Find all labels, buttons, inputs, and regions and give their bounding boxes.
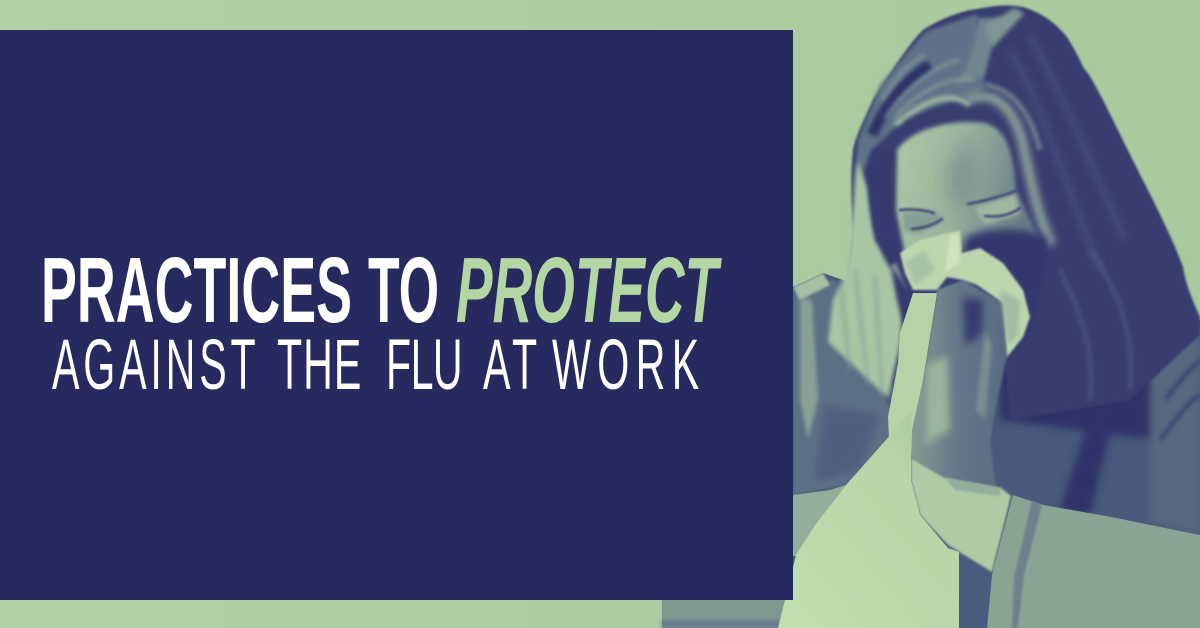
heading line 2: [52, 325, 706, 405]
photo: cloth held below hands: [778, 411, 959, 628]
panel: navy title block: [0, 30, 793, 600]
photo: woman blowing nose into tissue: [662, 5, 1200, 628]
heading line 2: THE: [277, 325, 362, 405]
photo: sweater and torso: [662, 273, 1200, 628]
heading line 2: FLU: [386, 325, 462, 405]
photo: hair: [828, 5, 1200, 420]
photo: face: [896, 122, 1048, 350]
photo: closed eyes: [900, 191, 1020, 229]
heading line 1: PROTECT: [456, 238, 722, 342]
photo: pale hair strands on left: [828, 160, 905, 398]
heading line 2: AT: [483, 325, 542, 405]
heading line 2: WORK: [552, 325, 706, 405]
heading line 1: TO: [368, 238, 439, 342]
heading line 2: AGAINST: [52, 325, 259, 405]
photo: hand: [888, 280, 1011, 572]
photo: light finger and wrist strip: [888, 293, 937, 460]
photo: tissue at nose: [900, 230, 1030, 357]
photo: sleeve: [987, 495, 1200, 628]
heading line 1: PRACTICES: [41, 238, 352, 342]
heading: title: [41, 238, 722, 405]
